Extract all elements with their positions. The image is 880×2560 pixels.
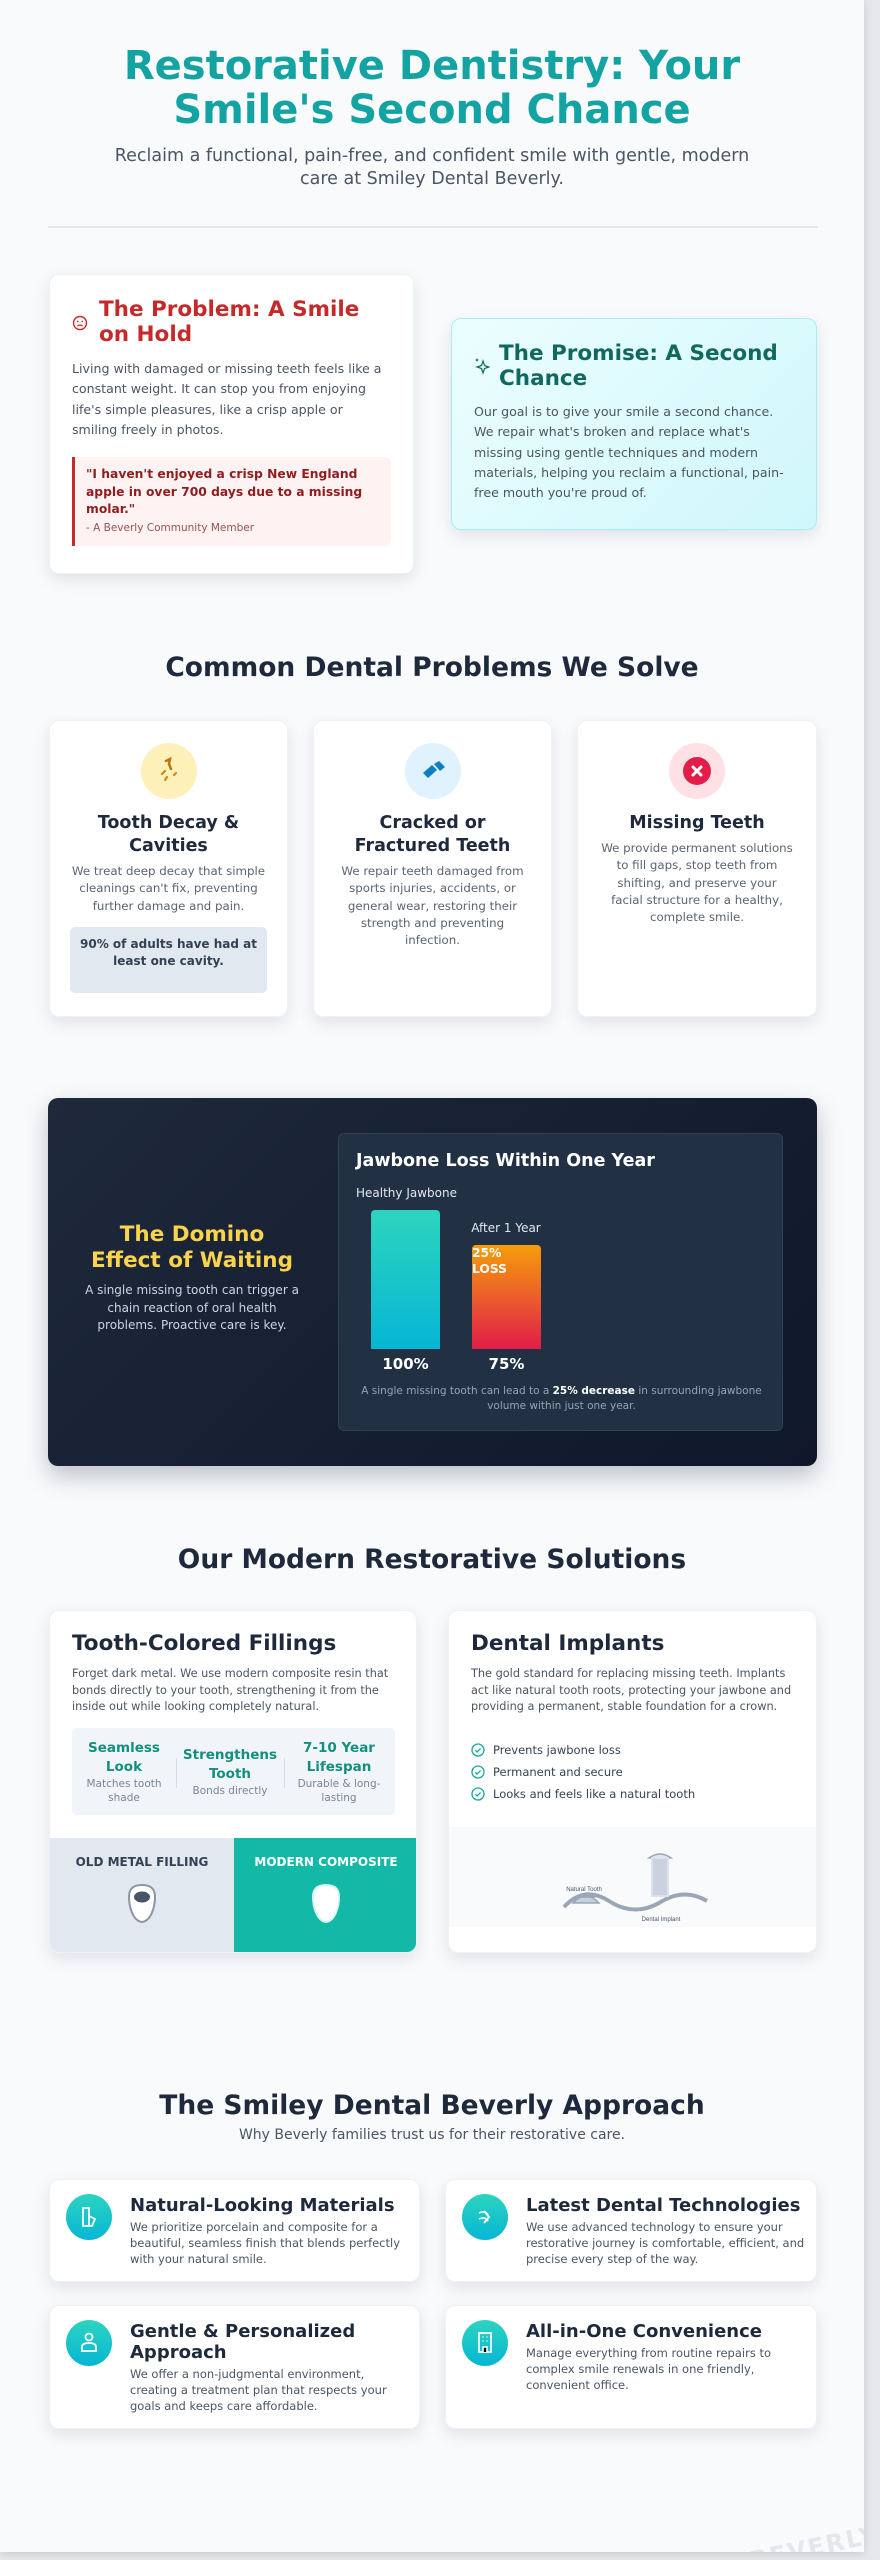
checklist: Prevents jawbone loss xyxy=(493,1743,621,1757)
checklist: Permanent and secure xyxy=(493,1765,623,1779)
quote callout: - A Beverly Community Member xyxy=(86,522,254,534)
feature lifespan: Lifespan xyxy=(307,1759,371,1775)
checklist: Looks and feels like a natural tooth xyxy=(493,1787,695,1801)
approach subtitle: Why Beverly families trust us for their restorative care. xyxy=(239,2127,625,2143)
icon: metal tooth xyxy=(128,1884,156,1923)
value 100: 100% xyxy=(382,1355,429,1373)
promise heading: The Promise: A Second Chance xyxy=(499,341,778,391)
comparison: modern composite: MODERN COMPOSITE xyxy=(254,1855,398,1869)
feature strengthens xyxy=(183,1747,277,1797)
domino heading xyxy=(91,1222,293,1273)
quote callout xyxy=(72,457,391,546)
title: Missing Teeth xyxy=(629,813,765,833)
promise text: Our goal is to give your smile a second chance. We repair what's broken and replace what's missing using gentle techniques and modern materials, helping you reclaim a functional, pain-free mouth you're proud of. xyxy=(474,404,784,500)
feature lifespan xyxy=(298,1740,380,1804)
icon: tech xyxy=(462,2194,508,2240)
bar after: LOSS xyxy=(472,1262,507,1276)
title: Smile's Second Chance xyxy=(173,87,691,133)
panel: gentle approach xyxy=(49,2305,420,2429)
domino heading: Effect of Waiting xyxy=(91,1248,293,1273)
panel: fillings xyxy=(49,1610,417,1953)
checklist xyxy=(471,1743,695,1801)
panel: missing xyxy=(577,720,817,1017)
chart: jawbone loss xyxy=(338,1133,783,1431)
feature lifespan: 7-10 Year xyxy=(303,1740,375,1756)
heading: solutions: Our Modern Restorative Solutions xyxy=(178,1544,686,1575)
text: We use advanced technology to ensure your restorative journey is comfortable, efficient, and precise every step of the way. xyxy=(526,2220,804,2266)
icon: people xyxy=(66,2320,112,2366)
feature lifespan: Durable & long- xyxy=(298,1778,380,1790)
icon: materials xyxy=(66,2194,112,2240)
text: We prioritize porcelain and composite for a beautiful, seamless finish that blends perfectly with your natural smile. xyxy=(130,2220,400,2266)
text: We offer a non-judgmental environment, creating a treatment plan that respects your goals and keeps care affordable. xyxy=(130,2367,387,2413)
title: Restorative Dentistry: Your xyxy=(124,43,740,89)
subtitle: Reclaim a functional, pain-free, and confident smile with gentle, modern care at Smiley Dental Beverly. xyxy=(115,146,749,189)
panel: tooth decay xyxy=(49,720,288,1017)
feature strengthens: Strengthens xyxy=(183,1747,277,1763)
title: Tooth Decay & xyxy=(98,813,239,833)
heading: common problems: Common Dental Problems We Solve xyxy=(165,652,699,683)
icon: decay xyxy=(141,743,197,799)
fillings title: Tooth-Colored Fillings xyxy=(72,1631,336,1656)
comparison: old metal xyxy=(50,1838,234,1954)
text: Manage everything from routine repairs to complex smile renewals in one friendly, convenient office. xyxy=(526,2346,771,2392)
feature seamless: Matches tooth shade xyxy=(86,1778,162,1804)
feature seamless: Look xyxy=(106,1759,142,1775)
title xyxy=(355,813,510,856)
text: We treat deep decay that simple cleanings can't fix, preventing further damage and pain. xyxy=(72,864,265,913)
feature strengthens: Bonds directly xyxy=(193,1785,267,1797)
icon: white tooth xyxy=(312,1884,340,1923)
panel: technologies xyxy=(445,2179,817,2282)
value 75: 75% xyxy=(489,1355,524,1373)
stat box xyxy=(70,927,267,993)
title: Latest Dental Technologies xyxy=(526,2195,800,2216)
title: Fractured Teeth xyxy=(355,836,510,856)
title: All-in-One Convenience xyxy=(526,2321,762,2342)
title: Cavities xyxy=(129,836,208,856)
bar after: 25% xyxy=(472,1246,501,1260)
problem text: Living with damaged or missing teeth feels like a constant weight. It can stop you from enjoying life's simple pleasures, like a crisp apple or smiling freely in photos. xyxy=(72,361,382,437)
chart caption: A single missing tooth can lead to a 25% decrease in surrounding jawbone volume within just one year. xyxy=(361,1385,762,1412)
implant illustration: Natural Tooth xyxy=(566,1887,602,1893)
fillings text: Forget dark metal. We use modern composite resin that bonds directly to your tooth, strengthening it from the inside out while looking completely natural. xyxy=(72,1667,388,1713)
icon: sad face xyxy=(72,316,88,330)
comparison: old metal: OLD METAL FILLING xyxy=(76,1855,208,1869)
panel: implants xyxy=(448,1610,817,1953)
comparison: modern composite xyxy=(234,1838,418,1954)
panel: problem xyxy=(49,274,414,574)
icon: building xyxy=(462,2320,508,2366)
stat box: 90% of adults have had at least one cavity. xyxy=(80,937,257,968)
title: Natural-Looking Materials xyxy=(130,2195,395,2216)
icon: cracked xyxy=(405,743,461,799)
panel: domino effect xyxy=(48,1098,817,1466)
icon: sparkle xyxy=(475,358,490,375)
implants title: Dental Implants xyxy=(471,1631,664,1656)
label healthy: Healthy Jawbone xyxy=(356,1186,457,1200)
quote callout: "I haven't enjoyed a crisp New England apple in over 700 days due to a missing molar." xyxy=(86,467,362,516)
title: Cracked or xyxy=(380,813,485,833)
title xyxy=(98,813,239,856)
implant illustration xyxy=(449,1827,818,1927)
feature lifespan: lasting xyxy=(321,1792,357,1804)
text: We provide permanent solutions to fill gaps, stop teeth from shifting, and preserve your facial structure for a healthy, complete smile. xyxy=(601,841,793,924)
implants text: The gold standard for replacing missing teeth. Implants act like natural tooth roots, protecting your jawbone and providing a permanent, stable foundation for a crown. xyxy=(471,1667,791,1713)
chart title: Jawbone Loss Within One Year xyxy=(356,1151,655,1171)
problem heading: The Problem: A Smile on Hold xyxy=(99,297,359,347)
feature seamless: Seamless xyxy=(88,1740,160,1756)
heading: approach: The Smiley Dental Beverly Approach xyxy=(159,2090,705,2121)
bar after xyxy=(472,1245,541,1349)
label after: After 1 Year xyxy=(471,1221,541,1235)
title xyxy=(124,43,740,133)
domino heading: The Domino xyxy=(120,1222,264,1247)
panel: convenience xyxy=(445,2305,817,2429)
domino text: A single missing tooth can trigger a chain reaction of oral health problems. Proactive care is key. xyxy=(85,1283,299,1332)
panel: promise xyxy=(451,318,817,530)
text: We repair teeth damaged from sports injuries, accidents, or general wear, restoring their strength and preventing infection. xyxy=(341,864,524,947)
feature seamless xyxy=(86,1740,162,1804)
bar healthy xyxy=(371,1210,440,1349)
title: Gentle & Personalized Approach xyxy=(130,2321,355,2363)
panel: cracked xyxy=(313,720,552,1017)
features box xyxy=(72,1728,395,1815)
implant illustration: Dental Implant xyxy=(642,1917,681,1923)
icon: missing xyxy=(669,743,725,799)
feature strengthens: Tooth xyxy=(209,1766,251,1782)
panel: natural materials xyxy=(49,2179,420,2282)
